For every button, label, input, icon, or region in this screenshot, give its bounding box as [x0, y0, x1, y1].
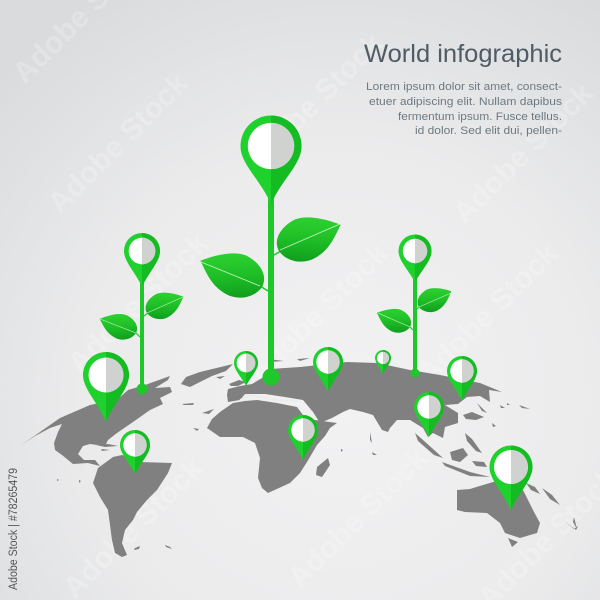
Africa	[207, 400, 337, 493]
pin: small Asia	[375, 350, 391, 374]
left leaf	[373, 302, 415, 337]
New Guinea and Pacific islands	[526, 483, 578, 530]
body text	[366, 81, 562, 137]
North America	[21, 376, 172, 466]
pin: East Africa	[288, 415, 318, 460]
infographic canvas: Adobe Stock	[62, 227, 215, 380]
right flower pin	[373, 234, 456, 378]
infographic canvas: Adobe Stock	[447, 77, 600, 230]
small islands	[57, 403, 530, 550]
title: World infographic	[364, 40, 562, 68]
left leaf	[95, 307, 141, 344]
Caribbean islands	[96, 444, 118, 451]
Britain and arctic fragments	[229, 358, 310, 386]
world map	[21, 358, 578, 557]
left flower pin	[95, 233, 189, 394]
central flower pin	[192, 116, 349, 386]
infographic canvas: Adobe Stock	[242, 237, 395, 390]
pin head	[124, 233, 160, 287]
infographic canvas: Adobe Stock	[237, 27, 390, 180]
body text: Lorem ipsum dolor sit amet, consect-	[366, 81, 562, 93]
stem	[410, 275, 420, 378]
pin head	[240, 116, 302, 204]
Madagascar	[316, 458, 330, 477]
body text: id dolor. Sed elit dui, pellen-	[415, 125, 562, 137]
Eurasia	[227, 362, 502, 438]
pin: North America	[83, 352, 129, 422]
pin: South America	[120, 430, 150, 474]
pin: East Asia	[447, 356, 477, 401]
Greenland and Arctic islands	[181, 364, 233, 387]
right leaf	[270, 204, 349, 270]
stem	[136, 280, 148, 394]
pin: Europe	[234, 351, 258, 386]
pin: Australia	[490, 446, 532, 510]
body text: etuer adipiscing elit. Nullam dapibus	[369, 96, 562, 108]
right leaf	[414, 280, 456, 317]
infographic canvas: Adobe Stock	[412, 237, 565, 390]
body text: fermentum ipsum. Fusce tellus.	[398, 111, 562, 123]
infographic canvas: Adobe Stock	[42, 67, 195, 220]
pin: Southeast Asia	[414, 392, 444, 437]
Indonesia	[415, 433, 490, 477]
Mediterranean sea highlight	[240, 395, 298, 401]
stem	[262, 198, 280, 386]
left leaf	[192, 240, 271, 306]
pin: Russia west	[313, 347, 343, 391]
right leaf	[141, 284, 189, 324]
Tasmania	[508, 538, 518, 547]
Australia	[457, 480, 540, 538]
Japan and East Asian islands	[463, 403, 505, 427]
infographic canvas: Adobe Stock	[282, 442, 435, 595]
South America	[93, 455, 172, 557]
stock id label: Adobe Stock | #78265479	[8, 468, 20, 590]
pin head	[398, 234, 432, 282]
